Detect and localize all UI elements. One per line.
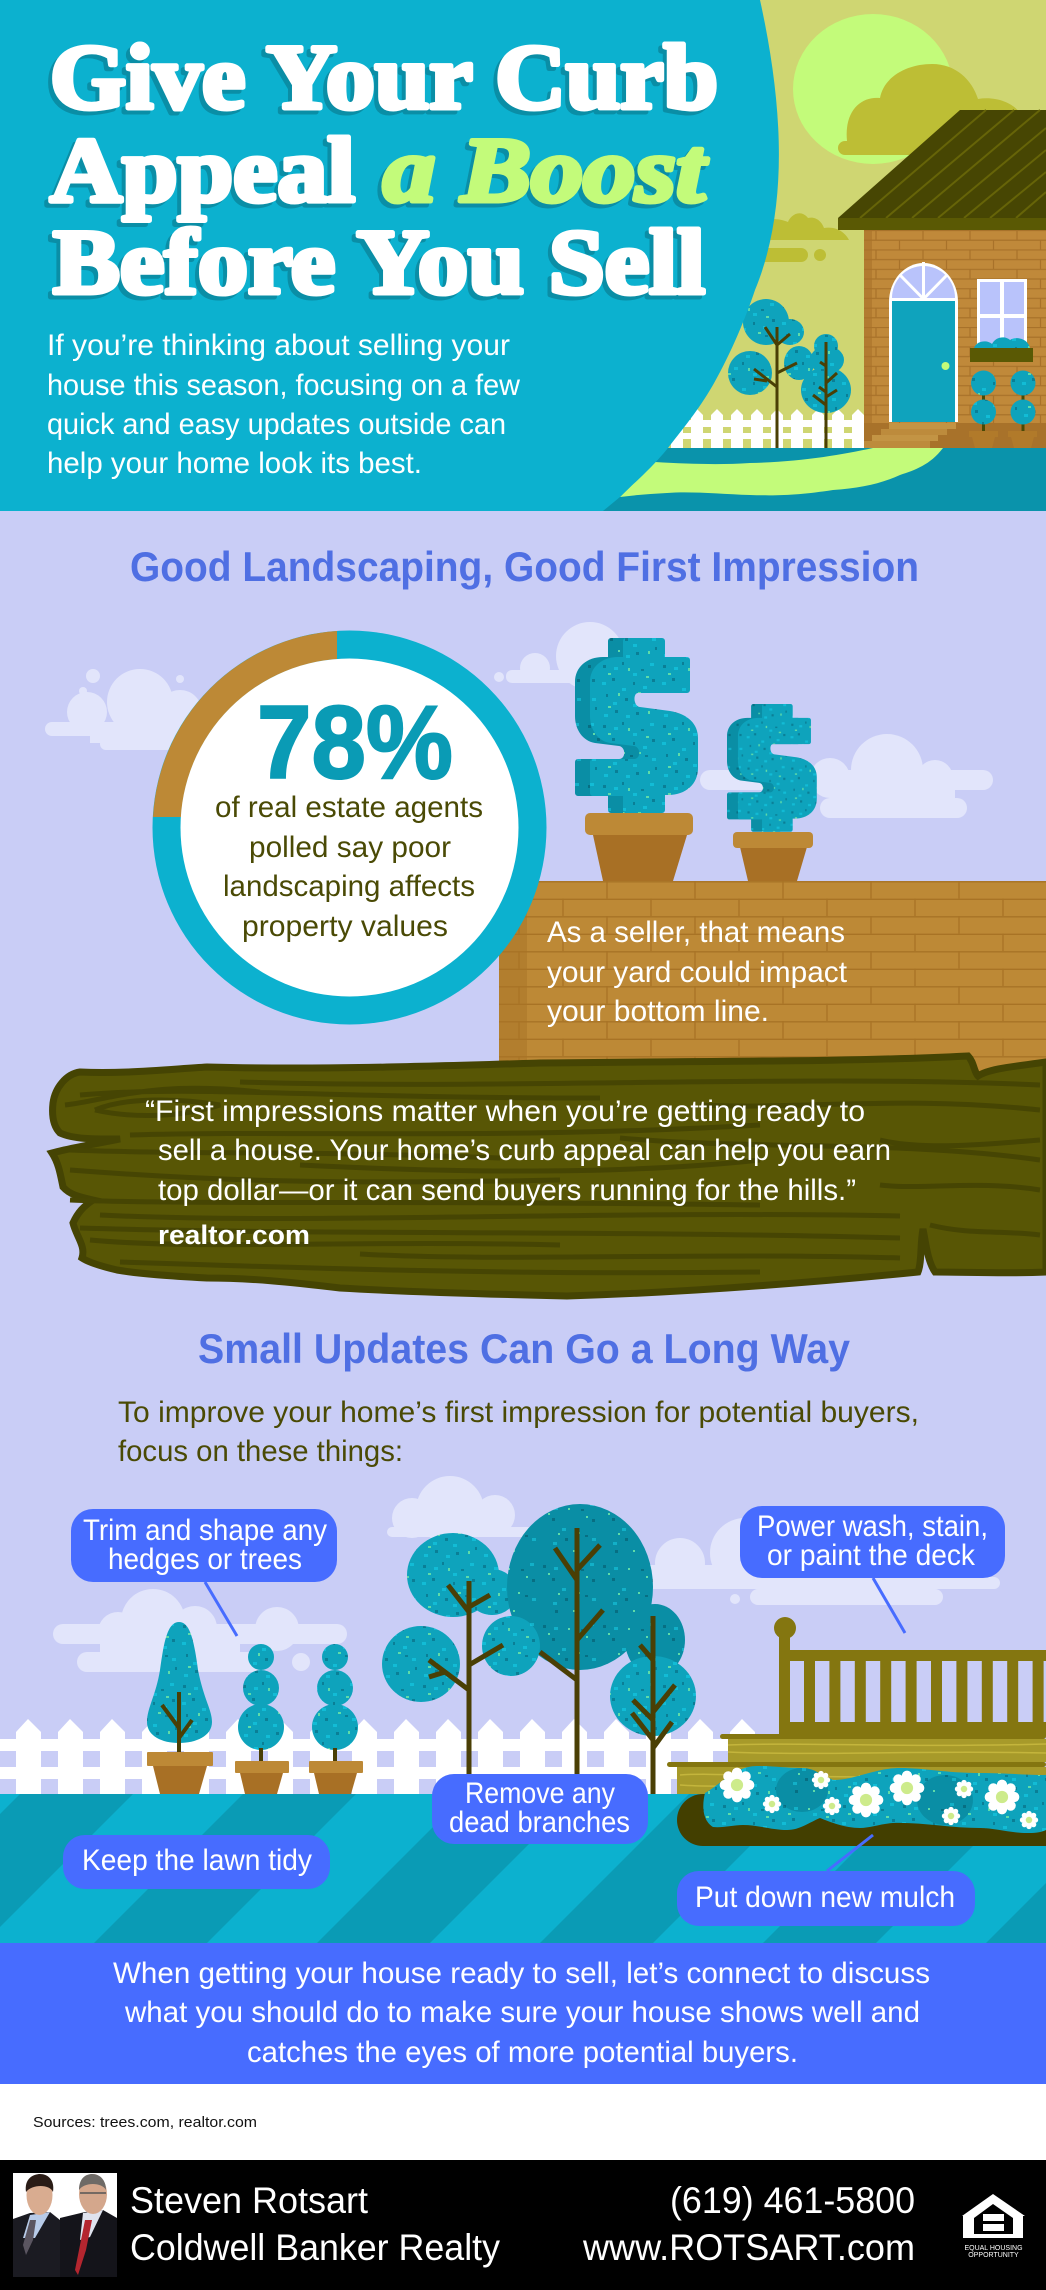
large trees (382, 1504, 696, 1794)
cone topiary (147, 1622, 213, 1794)
agent name: Steven Rotsart (130, 2180, 369, 2221)
tree foliage (382, 1504, 696, 1736)
big dollar topiary (575, 638, 698, 881)
icon: sun (793, 14, 953, 164)
quote source: realtor.com (158, 1220, 310, 1250)
icon: dollar topiaries (575, 638, 817, 881)
title lines: Appeal (50, 119, 355, 221)
wall text: your bottom line. (547, 995, 769, 1028)
footer (0, 2160, 1046, 2290)
intro to updates: focus on these things: (118, 1435, 403, 1468)
agents photo (13, 2173, 117, 2277)
wall text: As a seller, that means (547, 916, 845, 949)
title lines: Give Your Curb (50, 26, 718, 128)
callout: lawn (63, 1835, 330, 1889)
call to action: what you should do to make sure your house shows well and (124, 1996, 920, 2029)
intro to updates (118, 1396, 919, 1468)
phone: (619) 461-5800 (670, 2180, 915, 2221)
title shadow: Appeal (46, 123, 351, 225)
callout: dead branches (432, 1774, 648, 1844)
white fence (0, 1719, 755, 1794)
lawn (0, 1794, 1046, 1943)
ground and path (600, 448, 1046, 511)
flower bushes (703, 1766, 1046, 1833)
clouds in yard scene (53, 1476, 1000, 1672)
callout: power wash (740, 1506, 1005, 1633)
intro text: house this season, focusing on a few (47, 369, 520, 402)
callout: lawn: Keep the lawn tidy (82, 1844, 312, 1877)
wall text (547, 916, 848, 1028)
icon: cloud behind house (838, 64, 1020, 155)
call to action: When getting your house ready to sell, let’s connect to discuss (113, 1957, 930, 1990)
brokerage: Coldwell Banker Realty (130, 2227, 500, 2268)
quote text (145, 1095, 891, 1250)
quote text: top dollar—or it can send buyers running for the hills.” (158, 1174, 856, 1207)
stat caption (215, 791, 483, 943)
stat number: 78% (257, 685, 453, 801)
topiaries (147, 1622, 363, 1794)
flowers (720, 1768, 1038, 1829)
sources (0, 2084, 1046, 2160)
callout: trim: hedges or trees (108, 1543, 302, 1576)
intro text: help your home look its best. (47, 447, 422, 480)
callout: dead branches: dead branches (449, 1806, 630, 1839)
icon: equal housing: OPPORTUNITY (968, 2252, 1019, 2259)
heading: small updates: Small Updates Can Go a Long Way (198, 1325, 851, 1372)
window box (970, 337, 1033, 362)
intro text: quick and easy updates outside can (47, 408, 506, 441)
house wall (864, 230, 1046, 448)
stat caption: polled say poor (249, 831, 451, 864)
title lines: Before You Sell (53, 211, 705, 313)
brick wall (499, 881, 1046, 1076)
deck (667, 1617, 1046, 1794)
tree branches (429, 1528, 675, 1794)
call to action (0, 1943, 1046, 2084)
callout: trim (71, 1509, 337, 1636)
quote text: sell a house. Your home’s curb appeal can help you earn (158, 1134, 891, 1167)
mulch bed (677, 1794, 1046, 1846)
quote text: “First impressions matter when you’re getting ready to (145, 1095, 865, 1128)
call to action: catches the eyes of more potential buyers. (247, 2036, 798, 2069)
clouds in stat section (45, 622, 993, 818)
intro text (47, 329, 520, 480)
callout: mulch (677, 1835, 975, 1926)
trees in header (728, 299, 851, 448)
intro text: If you’re thinking about selling your (47, 329, 510, 362)
icon: window (977, 279, 1027, 349)
callout: trim: Trim and shape any (83, 1514, 327, 1547)
topiaries by door (969, 370, 1037, 448)
icon: small cloud (750, 213, 849, 262)
title lines (50, 26, 718, 313)
ball topiary left (235, 1644, 289, 1794)
title shadow: a Boost (379, 123, 704, 225)
intro to updates: To improve your home’s first impression for potential buyers, (118, 1396, 919, 1429)
roof (838, 110, 1046, 230)
icon: equal housing: EQUAL HOUSING (964, 2245, 1023, 2252)
heading: good landscaping: Good Landscaping, Good First Impression (130, 543, 919, 590)
title lines: a Boost (383, 119, 708, 221)
header scene: house (600, 0, 1046, 511)
wood plank (52, 1056, 1046, 1296)
sources: Sources: trees.com, realtor.com (33, 2114, 257, 2131)
icon: door (889, 262, 958, 422)
title shadow: Give Your Curb (46, 30, 714, 132)
callout: mulch: Put down new mulch (695, 1881, 955, 1914)
railing (774, 1617, 1046, 1736)
stat caption: landscaping affects (223, 870, 475, 903)
callout: dead branches: Remove any (465, 1777, 615, 1810)
title (46, 26, 718, 317)
title shadow: Before You Sell (49, 215, 701, 317)
wall text: your yard could impact (547, 956, 848, 989)
stat caption: of real estate agents (215, 791, 483, 824)
callout: power wash: Power wash, stain, (757, 1510, 988, 1543)
icon: equal housing (962, 2194, 1025, 2259)
steps (864, 423, 1046, 448)
small dollar topiary (727, 704, 817, 881)
callout: power wash: or paint the deck (767, 1539, 976, 1572)
donut stat 78% (152, 630, 546, 1024)
stat caption: property values (242, 910, 448, 943)
title shadow (46, 30, 714, 317)
white fence (660, 409, 864, 448)
website: www.ROTSART.com (582, 2227, 915, 2268)
ball topiary right (309, 1644, 363, 1794)
header teal panel (0, 0, 779, 511)
